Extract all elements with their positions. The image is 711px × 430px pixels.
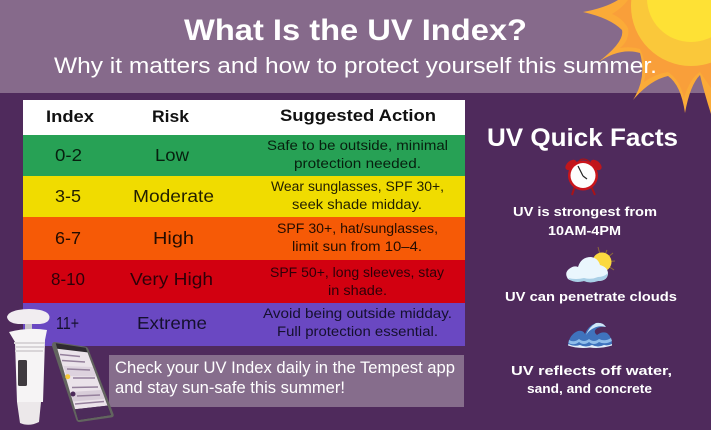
row: very high risk: in shade.	[328, 283, 387, 298]
callout: check the Tempest app: Check your UV Index daily in the Tempest app	[115, 359, 455, 377]
row: moderate risk: 3-5	[55, 186, 81, 206]
row: high risk	[23, 217, 465, 260]
fact: clouds: UV can penetrate clouds	[505, 289, 677, 304]
row: extreme risk: Full protection essential.	[277, 324, 438, 339]
row: very high risk: SPF 50+, long sleeves, stay	[270, 265, 444, 280]
row: high risk: 6-7	[55, 228, 81, 248]
heading: UV Quick Facts: UV Quick Facts	[487, 124, 678, 152]
row: high risk: limit sun from 10–4.	[292, 239, 422, 254]
row: high risk: High	[153, 228, 194, 248]
row: very high risk	[23, 260, 465, 303]
fact: strongest hours	[513, 204, 657, 238]
title: What Is the UV Index?	[184, 14, 527, 47]
callout: check the Tempest app: and stay sun-safe this summer!	[115, 379, 345, 397]
row: low risk	[23, 135, 465, 176]
fact: reflections	[511, 363, 672, 396]
row: extreme risk	[23, 303, 465, 346]
row: moderate risk: Wear sunglasses, SPF 30+,	[271, 179, 444, 194]
table header: Risk	[152, 108, 190, 126]
callout: check the Tempest app	[109, 355, 464, 407]
table header: Index	[46, 108, 95, 126]
table header	[23, 100, 465, 135]
row: moderate risk	[23, 176, 465, 217]
fact: strongest hours: 10AM-4PM	[548, 223, 621, 238]
table header: Suggested Action	[280, 107, 436, 125]
row: extreme risk: Extreme	[137, 313, 207, 333]
UV index table	[23, 100, 465, 346]
icon: sun	[583, 0, 711, 114]
icon: phone with Tempest app	[52, 342, 114, 422]
row: moderate risk: seek shade midday.	[292, 197, 422, 212]
row: low risk: protection needed.	[294, 156, 421, 171]
header band	[0, 0, 711, 93]
row: low risk: Safe to be outside, minimal	[267, 138, 448, 153]
row: low risk: Low	[155, 145, 189, 165]
row: high risk: SPF 30+, hat/sunglasses,	[277, 221, 438, 236]
row: low risk: 0-2	[55, 145, 82, 165]
row: moderate risk: Moderate	[133, 186, 214, 206]
icon: Tempest weather station	[7, 309, 50, 425]
fact: strongest hours: UV is strongest from	[513, 204, 657, 219]
icon: ocean wave	[568, 323, 612, 348]
row: extreme risk: 11+	[56, 313, 79, 333]
icon: alarm clock	[563, 158, 604, 195]
icon: cloud with sun	[566, 247, 615, 282]
fact: reflections: sand, and concrete	[527, 381, 652, 396]
fact: reflections: UV reflects off water,	[511, 363, 672, 378]
subtitle: Why it matters and how to protect yourself this summer.	[54, 53, 657, 78]
row: very high risk: 8-10	[51, 269, 85, 289]
row: extreme risk: Avoid being outside midday.	[263, 306, 452, 321]
row: very high risk: Very High	[130, 269, 213, 289]
